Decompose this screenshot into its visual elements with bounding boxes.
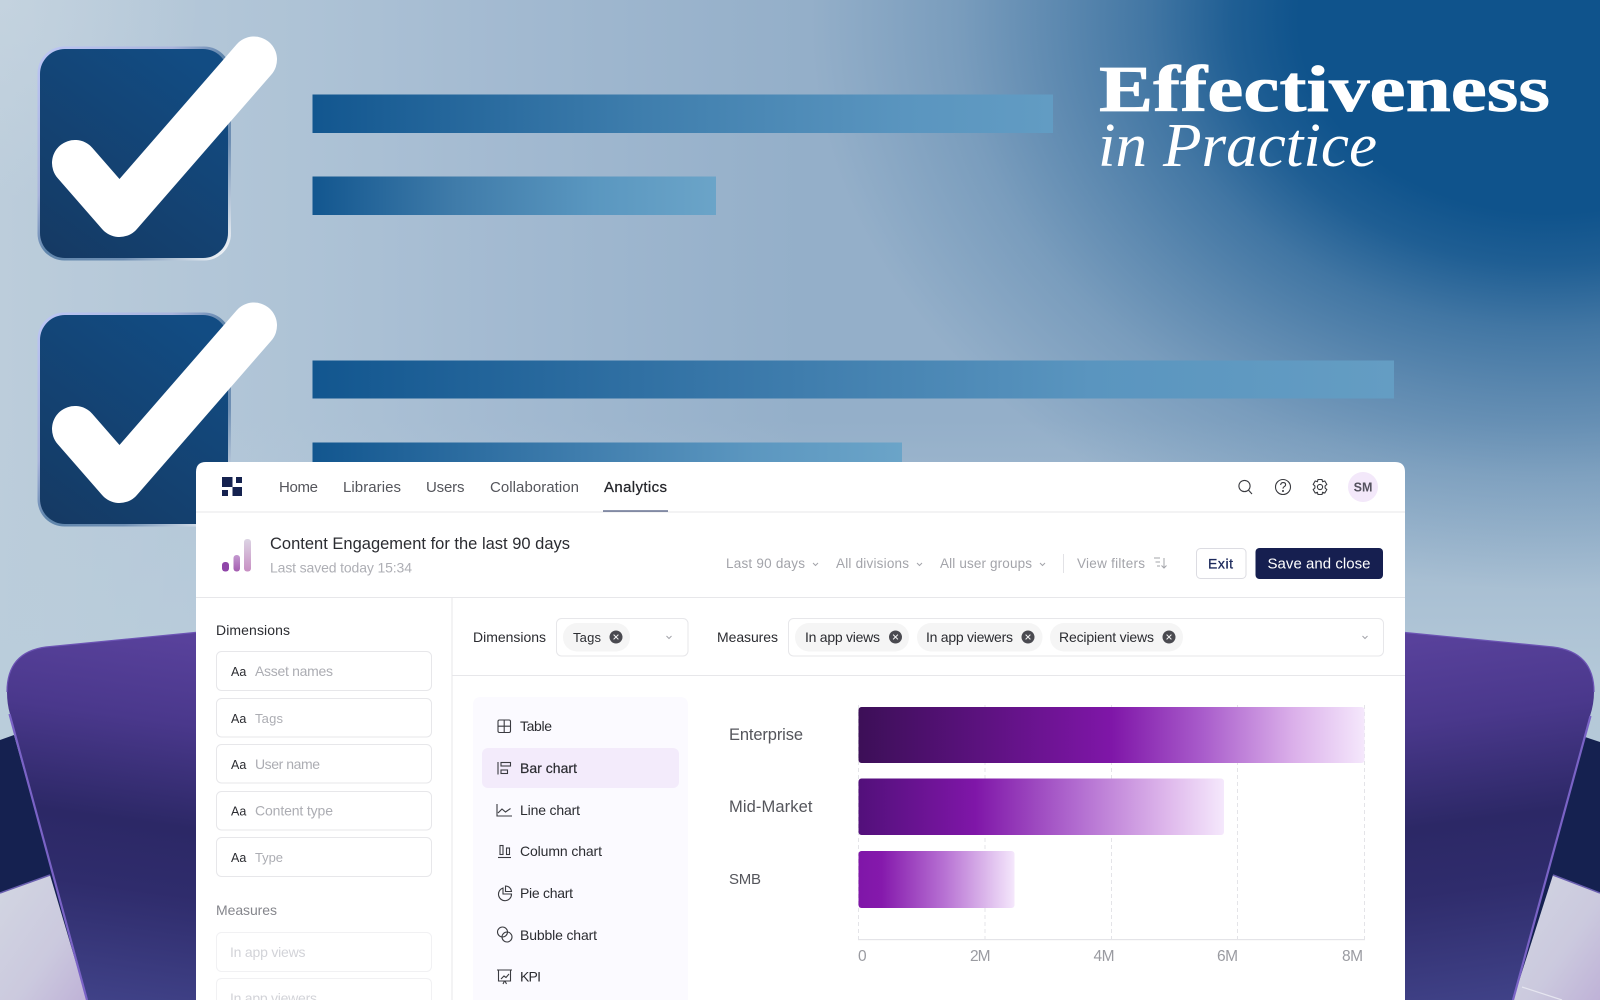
bar chart [729, 705, 1365, 965]
x axis labels: 8M [1342, 948, 1363, 965]
navigation bar: Libraries [343, 479, 401, 496]
field: content type [216, 792, 432, 830]
field: content type: Content type [255, 802, 333, 818]
gridlines [858, 705, 1364, 939]
chip: in app views: In app views [805, 629, 880, 645]
avatar: SM [1354, 480, 1372, 494]
icon: settings [1313, 480, 1327, 494]
bar: mid-market [729, 778, 1224, 835]
item: table: Table [520, 718, 552, 734]
panel: right lavender backing [1513, 737, 1600, 1000]
report header [196, 535, 1405, 598]
panel: right purple device [1400, 632, 1594, 1000]
field: user name: User name [255, 756, 320, 772]
icon: logo [222, 477, 242, 496]
sidebar: dimensions and measures: Dimensions [216, 622, 290, 638]
placeholder bar 3 [312, 360, 1394, 398]
sidebar: dimensions and measures: Measures [216, 902, 277, 918]
title [1098, 53, 1550, 180]
placeholder bar 1 [312, 94, 1053, 133]
title line: in Practice: in Practice [1098, 112, 1377, 180]
field: type: Type [255, 850, 283, 865]
chip: in app views [795, 623, 909, 652]
placeholder bar 2 [312, 176, 716, 215]
filters row: View filters [1077, 556, 1145, 571]
bar: smb: SMB [729, 871, 761, 888]
item: bubble chart: Bubble chart [520, 927, 597, 943]
item: pie chart: Pie chart [520, 885, 573, 901]
field: type: Aa [231, 851, 246, 865]
x axis labels: 2M [970, 948, 990, 965]
field: user name [216, 744, 432, 783]
field: tags [216, 698, 432, 737]
panel: chart type list [473, 697, 688, 1000]
report header: Last saved today 15:34 [270, 560, 412, 576]
field: type [216, 838, 432, 876]
x axis labels: 6M [1217, 948, 1238, 965]
selector: dimensions [473, 618, 688, 656]
filters row: Last 90 days [726, 556, 805, 571]
field: asset names [216, 652, 432, 690]
field: tags: Aa [231, 712, 246, 726]
icon: report bars [222, 539, 251, 572]
placeholder bar 4 [312, 442, 902, 468]
field: content type: Aa [231, 804, 246, 818]
field: user name: Aa [231, 758, 246, 772]
filters row [726, 554, 1166, 573]
chip: in app viewers: In app viewers [926, 629, 1013, 645]
panel: left purple device [7, 632, 200, 1000]
item: column chart: Column chart [520, 843, 602, 859]
selector: dimensions: Dimensions [473, 629, 546, 645]
item: kpi: KPI [520, 968, 541, 984]
x axis labels [858, 948, 1363, 965]
filters row: All user groups [940, 556, 1032, 571]
icon: search [1239, 480, 1252, 494]
navigation bar: Analytics [604, 479, 667, 496]
navigation bar: Collaboration [490, 479, 579, 496]
avatar [1348, 472, 1378, 502]
button: save and close: Save and close [1268, 556, 1370, 572]
field: asset names: Asset names [255, 663, 333, 679]
field: tags: Tags [255, 711, 284, 726]
button: exit: Exit [1208, 556, 1233, 572]
item: line chart: Line chart [520, 802, 580, 818]
bar: enterprise: Enterprise [729, 726, 803, 744]
bar: mid-market: Mid-Market [729, 798, 813, 816]
title line: Effectiveness: Effectiveness [1099, 53, 1550, 126]
x axis labels: 0 [858, 948, 867, 965]
panel: left lavender backing [0, 735, 87, 1000]
x axis labels: 4M [1094, 948, 1114, 965]
button: save and close [1256, 548, 1383, 579]
selector: measures: Measures [717, 629, 778, 645]
chip: tags [563, 623, 630, 652]
navigation bar [196, 472, 1405, 512]
bar: enterprise [729, 707, 1364, 763]
report header: Content Engagement for the last 90 days [270, 535, 570, 553]
filters row: All divisions [836, 556, 909, 571]
chip: tags: Tags [573, 630, 602, 645]
chip: recipient views: Recipient views [1059, 629, 1154, 645]
chip: in app viewers [917, 623, 1042, 652]
selector: measures [717, 618, 1384, 656]
chip: recipient views [1050, 623, 1183, 652]
navigation bar: Users [426, 479, 464, 496]
field: in app viewers [216, 978, 432, 1000]
bar: smb [729, 851, 1014, 908]
item: bar chart: Bar chart [520, 760, 577, 776]
icon: help [1276, 480, 1290, 494]
panel: analytics app window [196, 462, 1405, 1000]
item: table [498, 718, 552, 734]
item: kpi [497, 968, 541, 984]
icon: checkbox 2 [38, 312, 254, 526]
field: in app views [216, 932, 432, 972]
sidebar: dimensions and measures [216, 622, 432, 1000]
icon: checkbox 1 [38, 46, 254, 260]
field: asset names: Aa [231, 665, 246, 679]
field: in app views: In app views [230, 944, 306, 960]
navigation bar: Home [279, 479, 318, 496]
button: exit [1196, 548, 1246, 578]
